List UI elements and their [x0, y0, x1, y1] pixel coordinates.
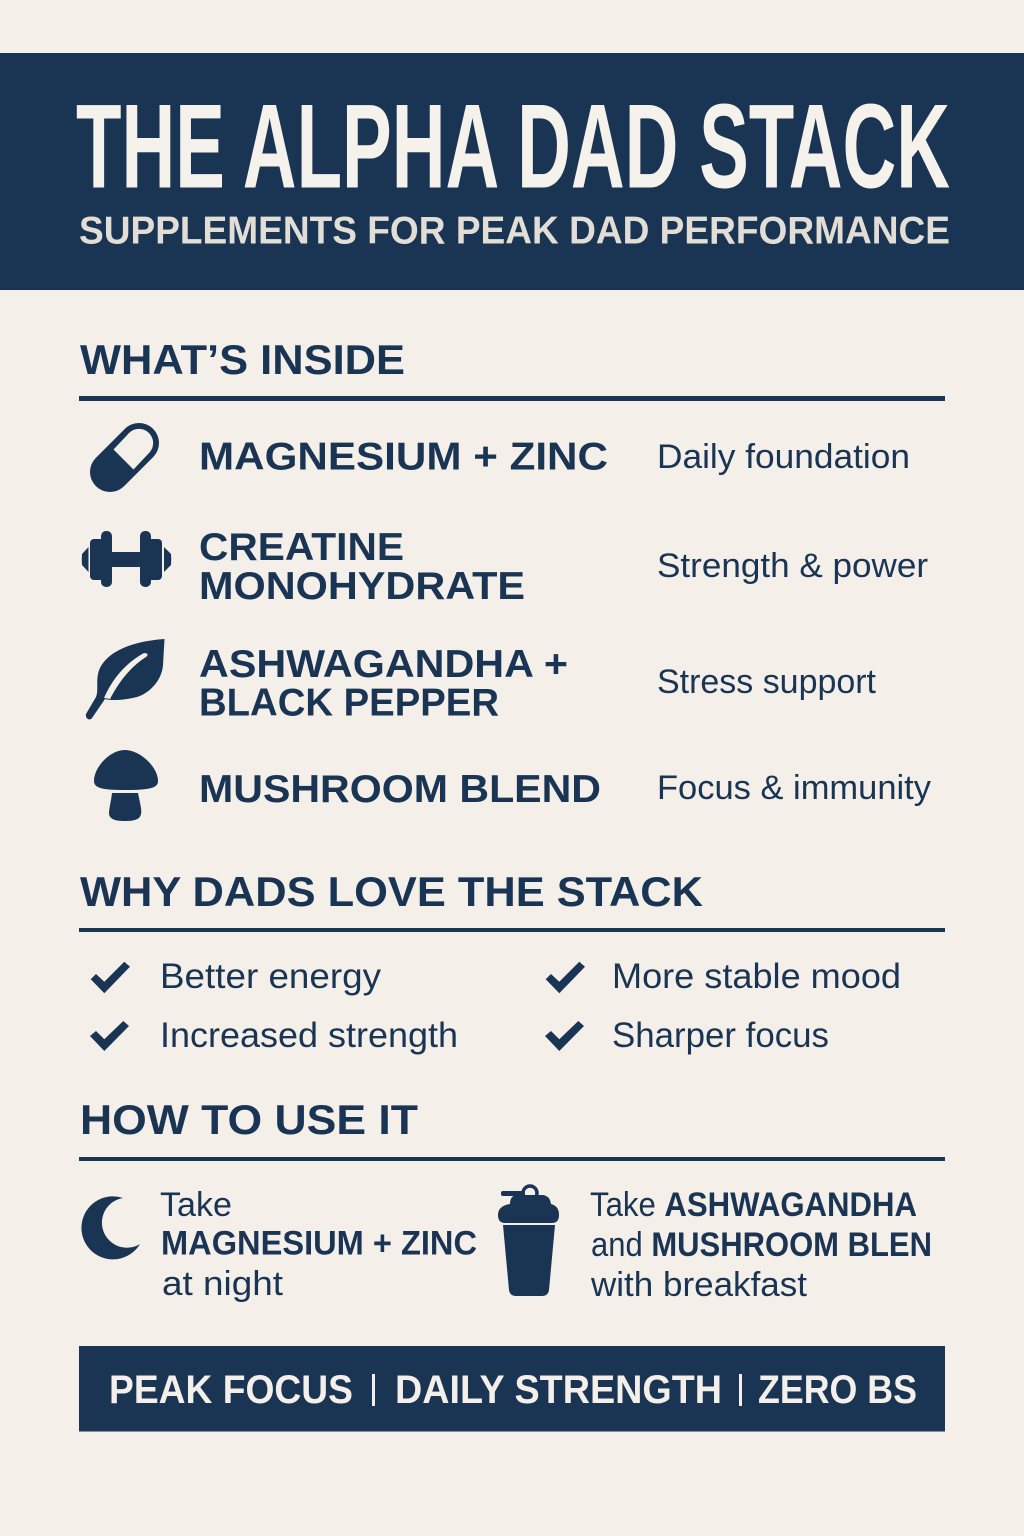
instructions: Take ASHWAGANDHA [590, 1186, 917, 1224]
instructions: Take [160, 1186, 232, 1224]
instructions [160, 1186, 477, 1303]
benefit: Focus & immunity [657, 769, 931, 807]
row: creatine monohydrate [82, 526, 928, 608]
benefit: increased strength: Increased strength [160, 1016, 458, 1055]
name: CREATINE [199, 526, 404, 569]
usage: breakfast [498, 1186, 932, 1304]
benefit: Strength & power [657, 547, 928, 585]
row: mushroom blend [94, 750, 931, 821]
benefit: Stress support [657, 663, 877, 701]
heading: what's inside [79, 336, 945, 401]
instructions: and MUSHROOM BLEN [591, 1226, 932, 1264]
row: ashwagandha + black pepper: BLACK PEPPER [199, 682, 499, 724]
instructions: MAGNESIUM + ZINC [161, 1224, 477, 1262]
name: ASHWAGANDHA + [199, 643, 568, 686]
instructions: with breakfast [590, 1266, 808, 1304]
footer banner: PEAK FOCUS [109, 1368, 353, 1412]
instructions: at night [162, 1265, 284, 1303]
icon: mushroom [94, 750, 158, 821]
row: magnesium + zinc [110, 429, 910, 478]
icon: leaf [86, 639, 164, 719]
footer banner: DAILY STRENGTH [395, 1368, 722, 1412]
heading: why dads love the stack: WHY DADS LOVE THE STACK [80, 868, 703, 915]
benefit: more stable mood: More stable mood [612, 957, 901, 996]
footer banner: ZERO BS [758, 1368, 917, 1412]
heading: what's inside: WHAT’S INSIDE [80, 336, 405, 383]
instructions [590, 1186, 932, 1304]
subtitle: SUPPLEMENTS FOR PEAK DAD PERFORMANCE [79, 210, 950, 252]
heading: how to use it: HOW TO USE IT [80, 1096, 418, 1143]
header banner [0, 53, 1024, 290]
icon: shaker [498, 1186, 559, 1296]
heading: how to use it [79, 1096, 945, 1161]
name: MUSHROOM BLEND [199, 768, 601, 811]
row: creatine monohydrate: MONOHYDRATE [199, 565, 525, 608]
footer banner [79, 1346, 945, 1432]
heading: why dads love the stack [79, 868, 945, 932]
icon: dumbbell [82, 531, 171, 587]
icon: capsule [110, 429, 153, 472]
icon: moon [81, 1196, 140, 1259]
benefit: better energy: Better energy [160, 957, 382, 996]
name: MAGNESIUM + ZINC [199, 436, 608, 478]
benefit: Daily foundation [657, 438, 910, 476]
row: ashwagandha + black pepper [86, 639, 877, 724]
usage: night [81, 1186, 477, 1303]
benefit: sharper focus: Sharper focus [612, 1016, 829, 1055]
